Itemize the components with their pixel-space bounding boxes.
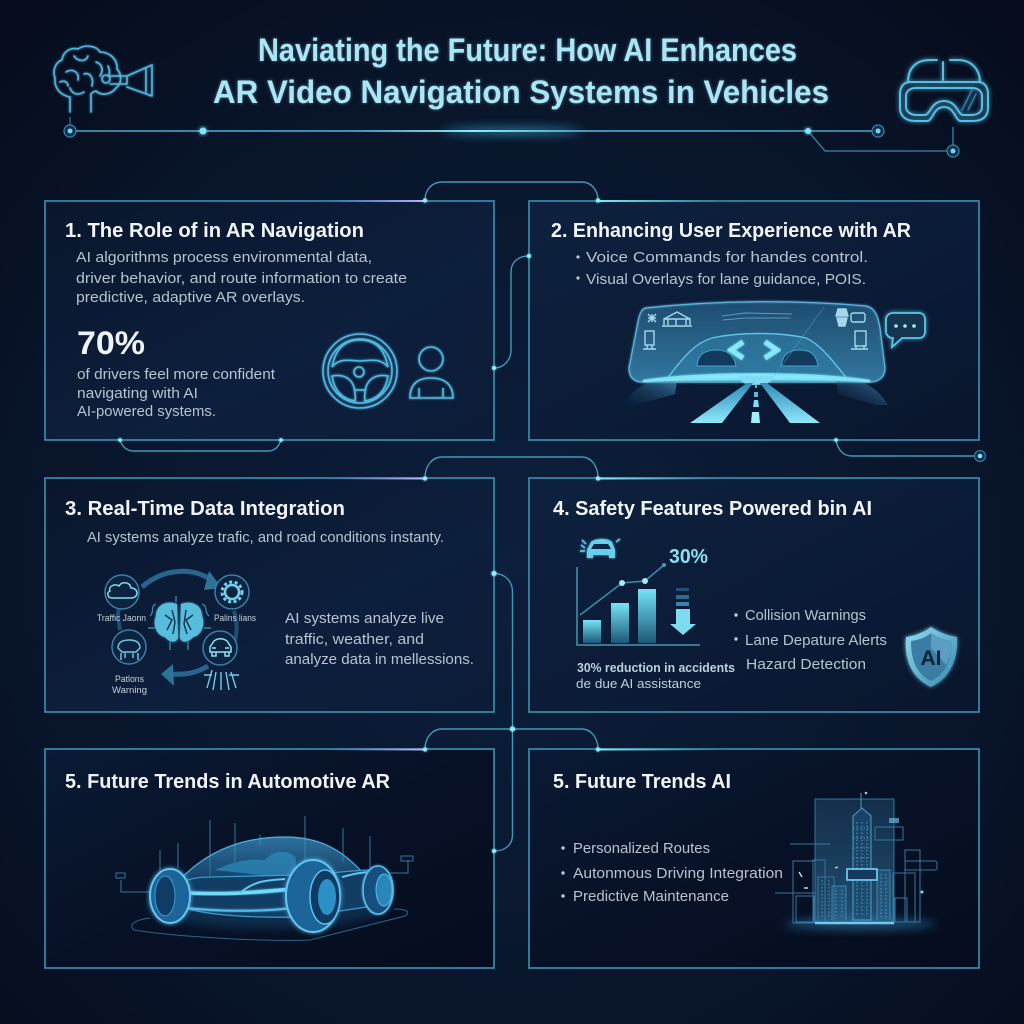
icon: chat bubble [886,313,925,347]
bullet list 4: Lane Depature Alerts [745,633,887,649]
diagram: data cycle [97,571,256,695]
icon: central brain [148,596,211,650]
description text 3 [285,610,474,668]
icon: gear [222,582,242,602]
illustration: AR windshield HUD [623,302,888,423]
icon: down arrow [670,588,696,635]
heading 5: 5. Future Trends in Automotive AR [65,771,391,793]
icon: road lines [204,670,239,690]
diagram labels [97,613,256,695]
icon: AI shield: AI [920,647,942,670]
connectors between panels [118,182,985,853]
bullet list 4: Hazard Detection [746,657,866,673]
stat caption: of drivers feel more confident [77,367,275,383]
title: AR Video Navigation Systems in Vehicles [213,74,829,110]
diagram labels: Traffic Jaonn [97,613,146,623]
stat caption: AI-powered systems. [77,404,216,420]
panel: 4 safety features [529,478,979,712]
icon: steering wheel [323,334,397,408]
panel: 6 future trends AI [529,749,979,968]
panel: 1 role of AI [45,201,494,440]
body text 1: driver behavior, and route information to create [76,270,407,287]
header connector line [64,117,959,157]
heading 6: 5. Future Trends AI [553,771,731,793]
icon: AI shield [906,627,957,687]
diagram labels: Patlons [115,674,144,684]
bullet list 6 [561,841,783,905]
chart caption [576,661,735,691]
illustration: holographic car [116,816,413,940]
chart caption: 30% reduction in accidents [577,661,735,675]
chart caption: de due AI assistance [576,677,701,691]
bullet list 4 [734,608,887,673]
heading 4: 4. Safety Features Powered bin AI [553,498,872,520]
bullet list 2 [576,249,868,288]
panel: 5 automotive AR [45,749,494,968]
title: Naviating the Future: How AI Enhances [258,32,797,68]
body text 1: predictive, adaptive AR overlays. [76,289,305,306]
bullet list 2: Voice Commands for handes control. [586,249,868,266]
icon: cloud [108,583,137,598]
body text 1 [76,249,407,306]
title [213,32,829,110]
bar chart [577,563,700,645]
stat caption: navigating with AI [77,386,198,402]
icon: person [410,347,453,398]
stat 70%: 70% [77,325,145,361]
panel: 3 real-time data [45,478,494,712]
heading 3: 3. Real-Time Data Integration [65,498,345,520]
description text 3: traffic, weather, and [285,631,424,648]
body text 1: AI algorithms process environmental data, [76,249,372,266]
bullet list 6: Autonmous Driving Integration [573,866,783,882]
bullet list 4: Collision Warnings [745,608,866,624]
bullet list 6: Predictive Maintenance [573,889,729,905]
intro text 3: AI systems analyze trafic, and road conditions instanty. [87,530,444,546]
illustration: holographic city [775,792,937,929]
stat caption [77,367,275,420]
panel: 2 user experience [529,201,979,440]
icon: brain with projector [54,46,152,112]
description text 3: analyze data in mellessions. [285,651,474,668]
icon: crash car [580,539,620,558]
heading 2: 2. Enhancing User Experience with AR [551,220,912,242]
icon: warning car [118,640,140,660]
bullet list 2: Visual Overlays for lane guidance, POIS. [586,271,866,288]
bullet list 6: Personalized Routes [573,841,710,857]
description text 3: AI systems analyze live [285,610,444,627]
diagram labels: Warning [112,685,147,695]
icon: car [210,639,231,656]
icon: VR headset [900,60,988,121]
heading 1: 1. The Role of in AR Navigation [65,220,364,242]
stat 30%: 30% [669,546,708,568]
diagram labels: Palins lians [214,613,256,623]
